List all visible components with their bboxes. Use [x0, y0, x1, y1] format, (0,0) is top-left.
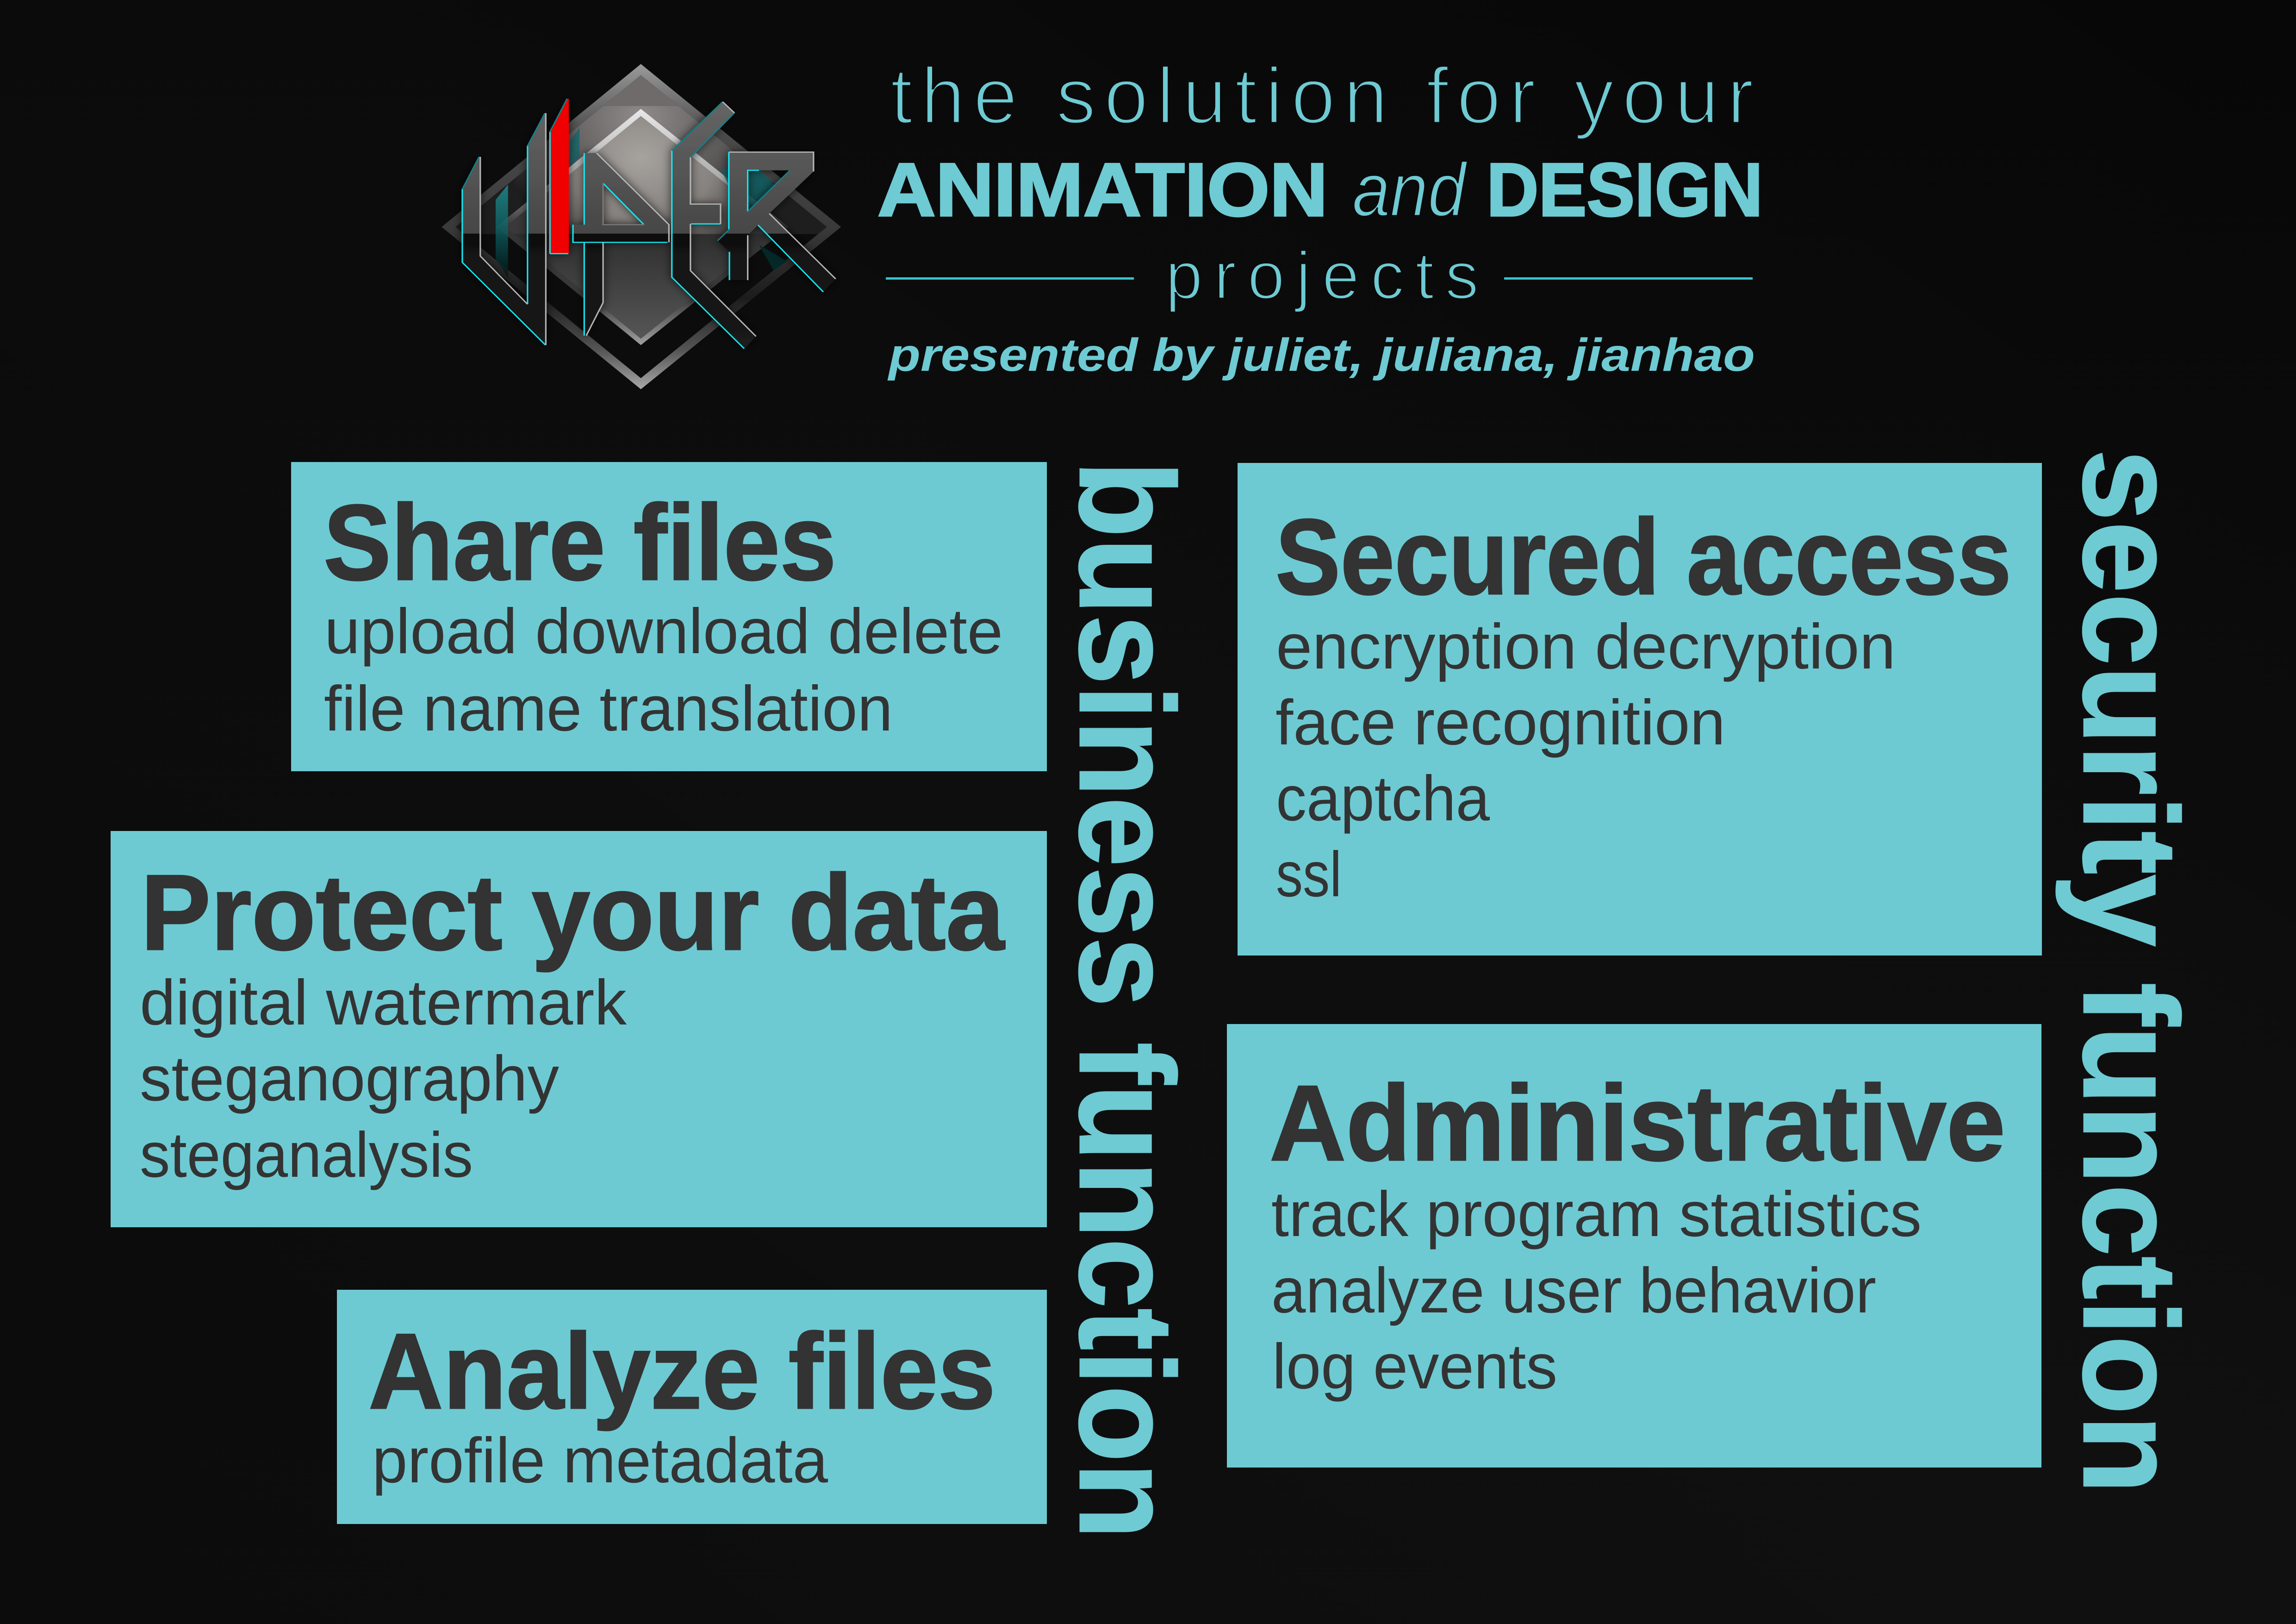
vertical label: security function: security function — [2055, 449, 2205, 1494]
heading: protect your data: Protect your data — [141, 853, 1005, 973]
secured list: ssl — [1276, 839, 1342, 910]
middle diamond lower half — [496, 234, 779, 345]
protect list: steganalysis — [140, 1119, 473, 1191]
secured list: face recognition — [1276, 687, 1725, 758]
upper diamond shading — [455, 106, 827, 234]
heading: share files: Share files — [324, 483, 836, 603]
protect list — [140, 967, 627, 1191]
cyan edge highlights — [462, 132, 823, 349]
panel: analyze files — [337, 1290, 1047, 1524]
middle diamond upper half — [508, 121, 765, 234]
letter P — [573, 153, 669, 336]
letters V I P E R — [462, 99, 836, 349]
secured list: captcha — [1276, 763, 1490, 834]
heading: administrative: Administrative — [1269, 1063, 2005, 1183]
panel: protect your data — [111, 831, 1047, 1227]
letter V — [462, 113, 546, 345]
administrative list: log events — [1272, 1331, 1557, 1402]
projects with rules: projects — [1165, 238, 1479, 313]
panel: administrative — [1227, 1024, 2041, 1468]
projects with rules — [886, 238, 1753, 313]
heading: analyze files: Analyze files — [368, 1312, 996, 1431]
letter I in red — [550, 99, 569, 254]
vertical label: business function: business function — [1052, 461, 1201, 1539]
tagline line one: the solution for your — [890, 51, 1754, 140]
protect list: steganography — [140, 1043, 559, 1114]
logo: Viper emblem — [442, 64, 841, 389]
administrative list: track program statistics — [1271, 1179, 1922, 1250]
panel: share files — [291, 462, 1047, 771]
heading: secured access: Secured access — [1276, 497, 2011, 617]
outer diamond ring — [442, 64, 841, 389]
secured list — [1276, 611, 1896, 910]
tagline line two: animation and design: ANIMATION — [877, 147, 1328, 232]
presenters: presented by juliet, juliana, jianhao — [887, 329, 1755, 381]
tagline line two: animation and design: and — [1352, 147, 1468, 232]
secured list: encryption decryption — [1276, 611, 1896, 682]
administrative list — [1271, 1179, 1922, 1402]
gloss band in upper diamond — [604, 75, 678, 106]
letter R — [718, 152, 836, 292]
teal dim edge highlights — [462, 99, 790, 241]
teal reflection bars — [496, 128, 787, 278]
tagline line two: animation and design: DESIGN — [1487, 147, 1763, 232]
share files list: upload download delete — [324, 596, 1003, 667]
grey edge highlights — [480, 102, 836, 345]
share files list: file name translation — [324, 673, 893, 744]
protect list: digital watermark — [140, 967, 627, 1038]
share files list — [324, 596, 1003, 744]
title block — [877, 51, 1763, 381]
panel: secured access — [1238, 463, 2042, 956]
administrative list: analyze user behavior — [1271, 1255, 1876, 1326]
middle diamond ring — [496, 109, 789, 345]
letter E — [672, 102, 756, 349]
tagline line two: animation and design — [877, 147, 1763, 232]
analyze list: profile metadata — [372, 1425, 828, 1496]
